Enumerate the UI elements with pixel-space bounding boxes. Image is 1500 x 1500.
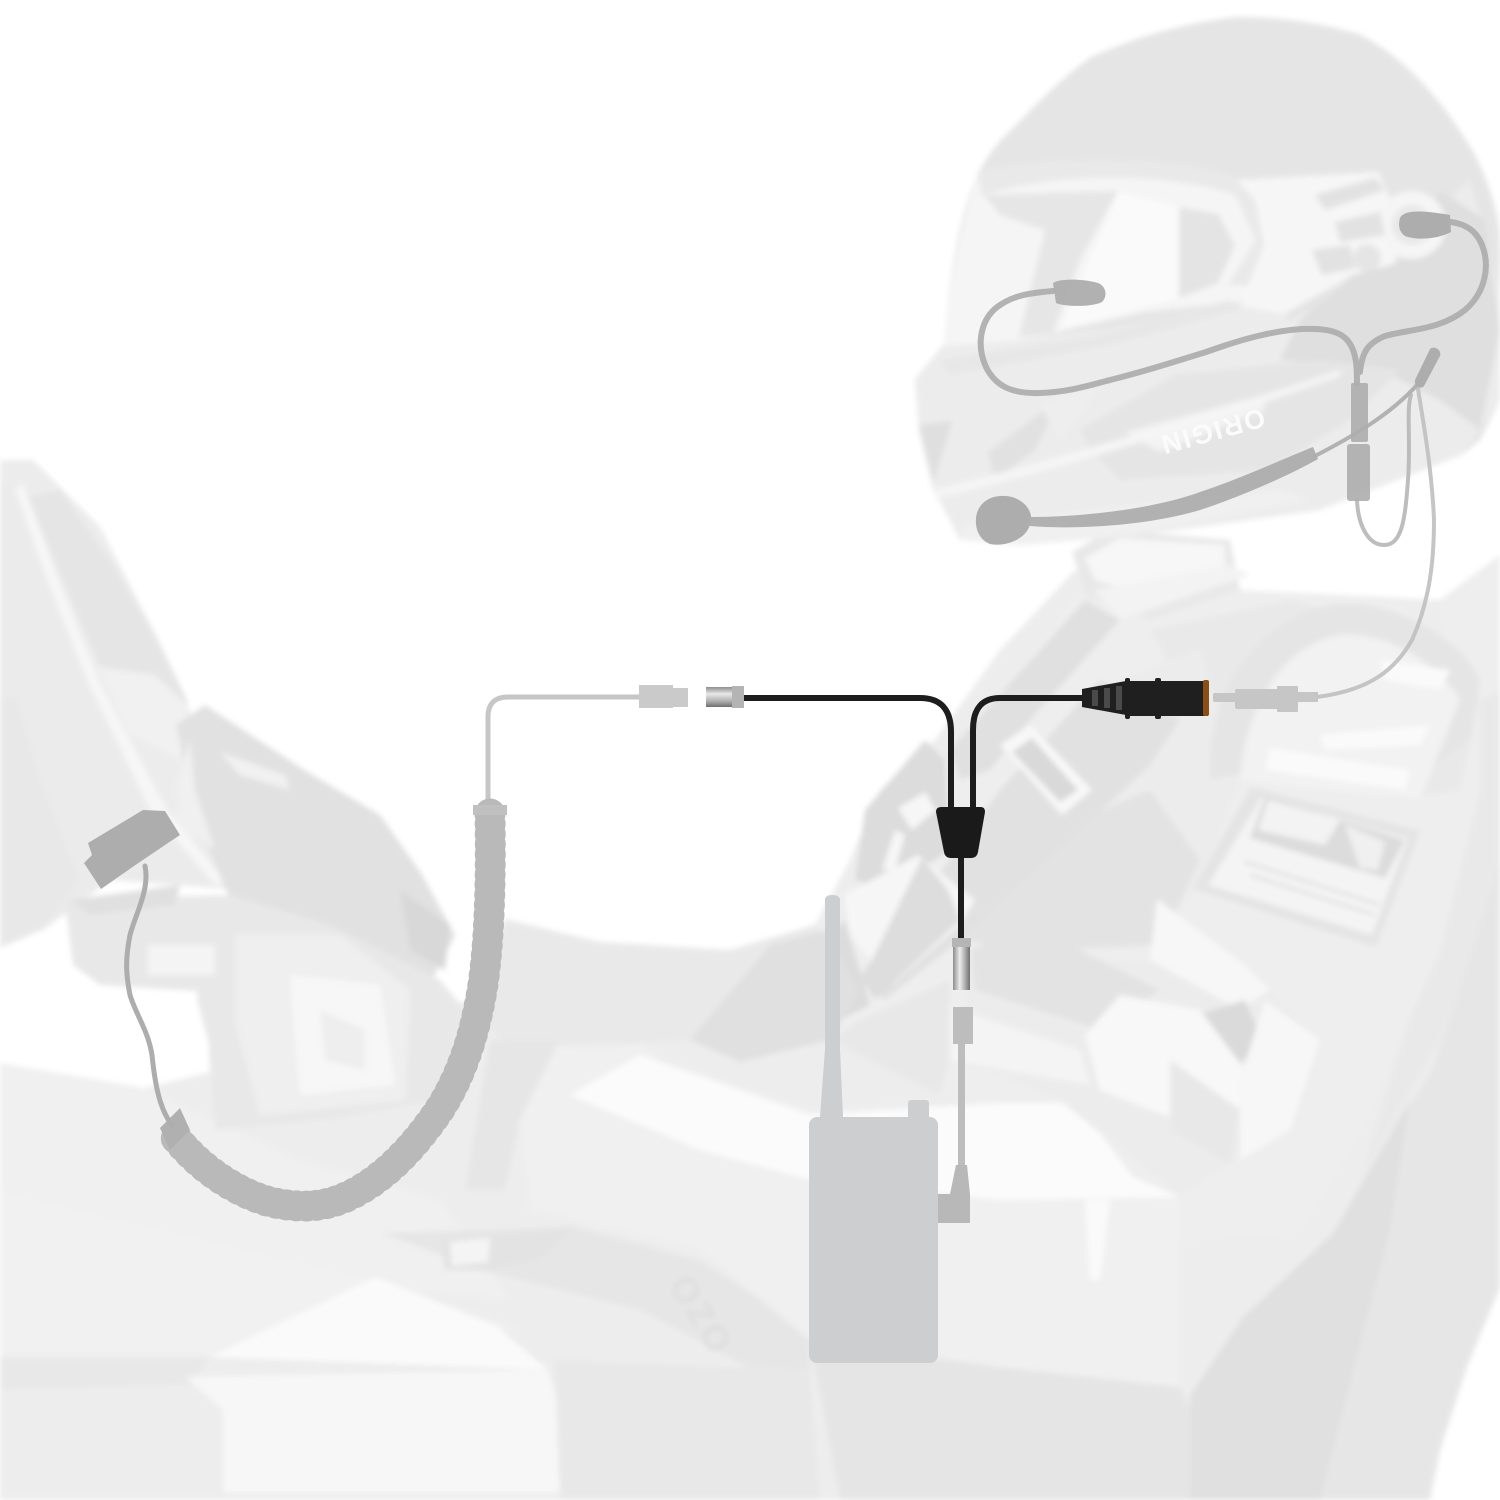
straight section: [488, 697, 640, 808]
mic foam: [976, 496, 1031, 545]
lower cable: [958, 855, 964, 940]
right arm with checks: [830, 899, 1320, 1197]
collar: [1072, 530, 1250, 620]
left ear piece: [1053, 280, 1105, 306]
splitter body: [936, 807, 985, 858]
right ear cable: [1360, 222, 1486, 372]
boom arm: [1030, 447, 1318, 527]
body silhouette base: [0, 555, 1500, 1500]
ghost radio: [809, 895, 938, 1363]
ghost wiring: headset: [981, 222, 1486, 697]
coil end block: [160, 1108, 190, 1150]
lower glove: [65, 885, 465, 1130]
ghost headset parts: [976, 212, 1451, 545]
under loop cable: [1357, 395, 1411, 545]
black socket: [1082, 678, 1209, 719]
knob: [908, 1100, 929, 1122]
adapter lower: [1347, 444, 1370, 501]
steering wheel: [0, 460, 240, 950]
down cable to plug: [1317, 383, 1434, 697]
right ear piece: [1399, 212, 1451, 239]
helmet visor: [940, 160, 1275, 375]
ghost cable: coil cord to plug: [127, 697, 640, 1206]
upper glove: [175, 705, 455, 980]
helmet brand mark: ORIGIN: [1156, 402, 1268, 460]
right branch cable: [973, 698, 1084, 810]
helmet side panel: [1237, 172, 1446, 322]
adapter upper: [1351, 383, 1368, 442]
ghost clip box: [84, 810, 180, 889]
radio body: [809, 1117, 938, 1363]
hip logo band: OZO: [661, 1268, 742, 1363]
ghost plug at headset side: [1213, 686, 1318, 712]
lap and lower body: [0, 1062, 1230, 1500]
near sleeve highlight: [510, 1023, 1180, 1387]
helmet shell: [915, 17, 1500, 545]
harness belts: [820, 600, 1180, 1030]
left branch cable: [744, 698, 951, 810]
copper opening: [1203, 680, 1209, 716]
forearm and cuff: [465, 919, 860, 1190]
coil: [172, 805, 507, 1206]
torso suit: [830, 590, 1480, 1240]
featured Y-cable: [706, 678, 1209, 990]
shoulder ring and sleeve: [1210, 604, 1480, 800]
ghost connector left: [639, 685, 688, 708]
left ear cable: [981, 291, 1357, 393]
shoulder patch: [1193, 787, 1420, 947]
antenna: [820, 895, 843, 1117]
silver connector bottom: [952, 938, 971, 990]
silver connector left: [706, 686, 744, 708]
thin lead to clip: [127, 866, 172, 1125]
ghost radio lead: [938, 1007, 973, 1223]
boom wire: [1315, 385, 1417, 456]
seat: [1190, 555, 1500, 1500]
fingers gap: [0, 930, 209, 1088]
boom tip: [1415, 348, 1440, 388]
